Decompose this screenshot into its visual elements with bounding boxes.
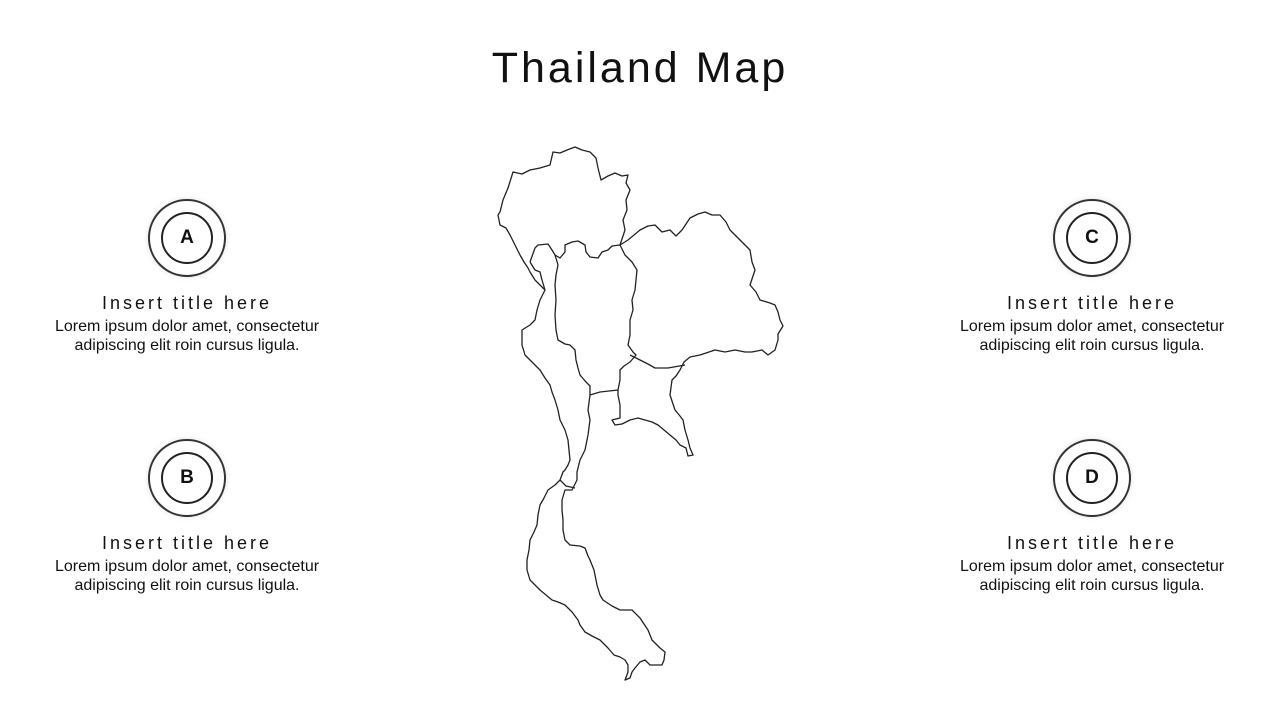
icon C [1053,199,1131,277]
title C: Insert title here [1007,293,1177,313]
text B: adipiscing elit roin cursus ligula. [74,577,300,594]
icon A [148,199,226,277]
item C [960,198,1224,354]
item B [55,438,319,594]
icon D: D [1085,467,1099,488]
title D: Insert title here [1007,533,1177,553]
text A: Lorem ipsum dolor amet, consectetur [55,318,319,335]
text A: adipiscing elit roin cursus ligula. [74,337,300,354]
text D: Lorem ipsum dolor amet, consectetur [960,558,1224,575]
text D: adipiscing elit roin cursus ligula. [980,577,1204,594]
icon D [1053,439,1131,517]
icon B: B [180,467,194,488]
text C [960,318,1224,354]
text D [960,558,1224,594]
title: Thailand Map [492,44,788,92]
text B: Lorem ipsum dolor amet, consectetur [55,558,319,575]
item A [55,198,319,354]
item D [960,438,1224,594]
icon A: A [180,227,194,248]
icon C: C [1085,227,1099,248]
icon B [148,439,226,517]
text B [55,558,319,594]
text A [55,318,319,354]
text C: Lorem ipsum dolor amet, consectetur [960,318,1224,335]
title A: Insert title here [102,293,272,313]
text C: adipiscing elit roin cursus ligula. [980,337,1204,354]
title B: Insert title here [102,533,272,553]
